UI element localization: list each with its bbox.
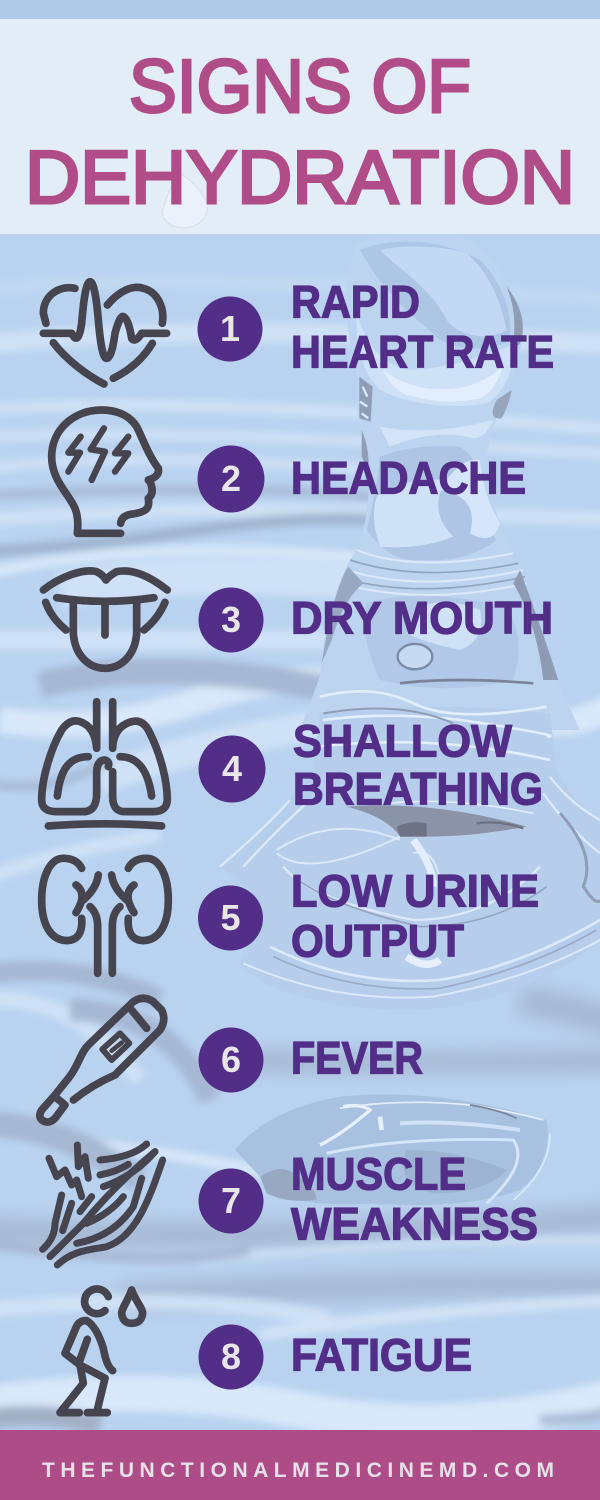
label: RAPID xyxy=(291,276,420,328)
icon: lungs xyxy=(42,702,167,826)
row 5: low urine output xyxy=(42,858,539,973)
number badge 1 xyxy=(198,296,262,362)
number badge 6 xyxy=(198,1028,264,1092)
heading line 1: SIGNS OF xyxy=(129,44,471,128)
number badge 7 xyxy=(198,1168,264,1234)
label: OUTPUT xyxy=(291,916,464,966)
label: HEADACHE xyxy=(291,452,526,504)
icon: muscle with lightning xyxy=(43,1144,163,1265)
icon: tired person with sweat drop xyxy=(60,1289,143,1413)
number badge 7: 7 xyxy=(221,1180,241,1221)
row 6: fever xyxy=(40,998,423,1122)
label: SHALLOW xyxy=(293,716,512,766)
number badge 3 xyxy=(198,588,264,652)
number badge 5 xyxy=(198,886,263,950)
title panel xyxy=(0,19,600,234)
label: DRY MOUTH xyxy=(291,592,553,644)
row 4: shallow breathing xyxy=(42,702,543,826)
label: LOW URINE xyxy=(291,866,539,916)
row 2: headache xyxy=(52,410,526,533)
number badge 6: 6 xyxy=(221,1039,241,1080)
number badge 4 xyxy=(198,736,266,802)
label xyxy=(291,1148,538,1250)
number badge 2: 2 xyxy=(221,458,241,499)
footer band xyxy=(0,1430,600,1500)
row 1: rapid heart rate xyxy=(43,276,554,384)
icon: kidneys xyxy=(42,858,168,973)
icon: thermometer xyxy=(40,998,164,1122)
top strip xyxy=(0,0,600,19)
number badge 5: 5 xyxy=(220,897,241,938)
number badge 1: 1 xyxy=(220,308,240,349)
icon: mouth with tongue xyxy=(43,571,167,668)
row 8: fatigue xyxy=(60,1289,472,1413)
lower ripple disc xyxy=(235,1094,550,1205)
label xyxy=(291,866,539,966)
number badge 8: 8 xyxy=(221,1336,241,1377)
row 7: muscle weakness xyxy=(43,1144,538,1265)
label xyxy=(293,716,543,814)
number badge 8 xyxy=(198,1324,264,1390)
icon: heart with pulse xyxy=(43,282,167,384)
label xyxy=(291,276,554,378)
label: MUSCLE xyxy=(291,1148,466,1200)
droplet xyxy=(162,172,208,228)
label: FATIGUE xyxy=(291,1330,472,1380)
label: BREATHING xyxy=(293,764,543,814)
number badge 3: 3 xyxy=(221,599,241,640)
water skirt and ripples xyxy=(220,680,600,1010)
number badge 4: 4 xyxy=(222,748,242,789)
label: WEAKNESS xyxy=(291,1198,538,1250)
row 3: dry mouth xyxy=(43,571,553,668)
number badge 2 xyxy=(198,446,264,512)
label: FEVER xyxy=(291,1032,423,1084)
label: HEART RATE xyxy=(291,326,554,378)
heading line 2: DEHYDRATION xyxy=(25,135,575,219)
water column xyxy=(300,231,580,730)
website: THEFUNCTIONALMEDICINEMD.COM xyxy=(42,1459,554,1482)
icon: head with lightning xyxy=(52,410,159,533)
